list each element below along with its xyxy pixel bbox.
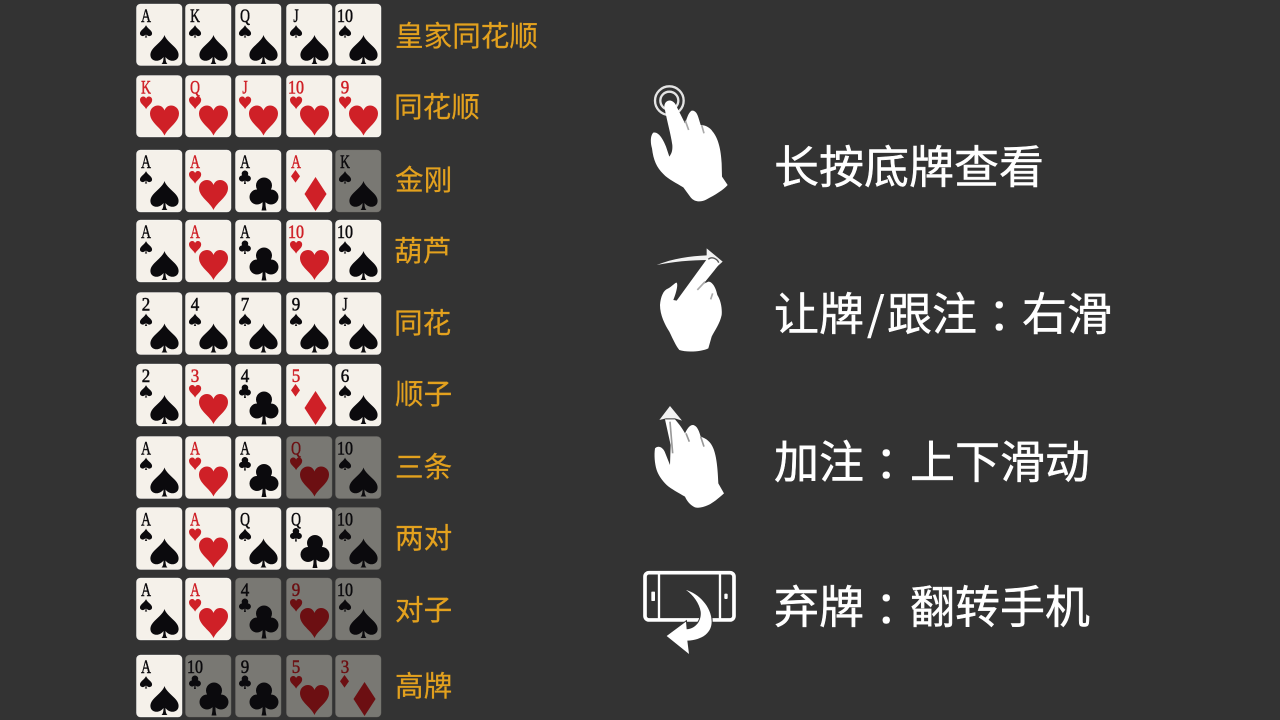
card 10 spade dimmed [336, 508, 381, 570]
icon: long press hand [651, 86, 728, 201]
card A spade: A [141, 221, 151, 243]
card A spade: A [141, 151, 151, 173]
card 10 spade: 10 [337, 221, 353, 242]
card 9 spade [286, 292, 332, 354]
card row: straight flush [136, 76, 381, 137]
card Q spade: Q [240, 508, 250, 530]
card 4 club dimmed [236, 578, 281, 640]
card 9 spade: 9 [292, 294, 300, 315]
card K heart [136, 76, 182, 137]
card row: three of a kind [136, 436, 381, 498]
text: check or call swipe right: 跟注 [887, 289, 977, 340]
icon: swipe right hand [657, 248, 723, 352]
card 9 heart dimmed: 9 [292, 579, 300, 600]
card A spade [136, 655, 182, 717]
card J spade [286, 4, 332, 66]
card A spade [136, 578, 182, 640]
card A heart [186, 508, 231, 570]
label: high card: 高牌 [395, 671, 452, 703]
card Q club: Q [291, 508, 301, 530]
card A club [236, 220, 281, 282]
card 5 heart dimmed [286, 655, 332, 717]
card 10 spade dimmed: 10 [337, 508, 353, 530]
card A club [236, 436, 281, 498]
card Q spade [236, 508, 281, 570]
text: check or call swipe right: 右滑 [1022, 289, 1112, 340]
card A heart [186, 578, 231, 640]
card 10 spade [336, 4, 381, 66]
card 5 heart dimmed: 5 [292, 656, 300, 677]
card row: straight [136, 364, 381, 426]
card Q heart: Q [190, 76, 200, 98]
label: two pair: 两对 [395, 523, 452, 555]
label: straight: 顺子 [395, 379, 452, 411]
card K spade [186, 4, 231, 66]
card 10 club dimmed [186, 655, 231, 717]
card A diamond [286, 150, 332, 212]
card A spade [136, 508, 182, 570]
card A heart: A [190, 221, 200, 243]
card row: one pair [136, 578, 381, 640]
label: royal flush: 皇家同花顺 [395, 21, 538, 53]
card 4 club [236, 364, 281, 426]
card A heart [186, 436, 231, 498]
card K spade: K [190, 5, 200, 27]
text: fold flip the phone: 翻转手机 [910, 582, 1090, 633]
card 10 heart: 10 [288, 221, 304, 242]
card 7 spade [236, 292, 281, 354]
card 4 spade [186, 292, 231, 354]
label: one pair: 对子 [395, 595, 452, 627]
card Q club [286, 508, 332, 570]
card A heart [186, 220, 231, 282]
card row: flush [136, 292, 381, 354]
text: check or call swipe right: 让牌 [774, 289, 864, 340]
card A club: A [240, 151, 250, 173]
card row: full house [136, 220, 381, 282]
card J spade [336, 292, 381, 354]
card A heart: A [190, 508, 200, 530]
card A heart: A [190, 151, 200, 173]
card A spade [136, 436, 182, 498]
card 4 spade: 4 [191, 294, 199, 315]
card A spade: A [141, 579, 151, 601]
card 10 heart: 10 [288, 76, 304, 98]
card A club: A [240, 221, 250, 243]
card 4 club dimmed: 4 [241, 579, 249, 600]
card Q spade: Q [240, 5, 250, 27]
card 5 diamond [286, 364, 332, 426]
card row: high card [136, 655, 381, 717]
card 10 spade dimmed: 10 [337, 437, 353, 459]
card 10 heart [286, 76, 332, 137]
text: fold flip the phone: 弃牌 [774, 582, 864, 633]
card row: two pair [136, 508, 381, 570]
card Q heart dimmed [286, 436, 332, 498]
card A spade: A [141, 656, 151, 678]
card 9 heart: 9 [341, 77, 349, 98]
card 9 club dimmed: 9 [241, 656, 249, 677]
card 9 heart [336, 76, 381, 137]
text: check or call swipe right: ： [988, 289, 1033, 340]
card 3 heart [186, 364, 231, 426]
card 4 club: 4 [241, 365, 249, 386]
card A diamond: A [291, 151, 301, 173]
card 7 spade: 7 [241, 294, 249, 315]
card 2 spade: 2 [142, 294, 150, 315]
label: four of a kind: 金刚 [395, 165, 452, 197]
card A heart: A [190, 437, 200, 459]
card A spade [136, 150, 182, 212]
card 9 heart dimmed [286, 578, 332, 640]
card 2 spade [136, 292, 182, 354]
card K spade dimmed: K [340, 151, 350, 173]
card 10 spade [336, 220, 381, 282]
card J spade: J [293, 5, 299, 27]
card 10 spade dimmed [336, 436, 381, 498]
text: raise swipe up and down: 上下滑动 [910, 437, 1090, 488]
card 10 spade dimmed: 10 [337, 579, 353, 600]
label: straight flush: 同花顺 [394, 92, 480, 124]
card A heart: A [190, 579, 200, 601]
card 3 diamond dimmed [336, 655, 381, 717]
card A spade: A [141, 508, 151, 530]
icon: swipe up hand [655, 406, 724, 508]
card 10 spade dimmed [336, 578, 381, 640]
card 2 spade: 2 [142, 365, 150, 386]
card Q heart [186, 76, 231, 137]
label: three of a kind: 三条 [395, 452, 452, 484]
text: fold flip the phone: ： [875, 582, 920, 633]
text: raise swipe up and down: ： [875, 437, 920, 488]
card 2 spade [136, 364, 182, 426]
card 3 diamond dimmed: 3 [341, 656, 349, 677]
card K spade dimmed [336, 150, 381, 212]
card K heart: K [141, 76, 151, 98]
card J heart: J [242, 76, 248, 98]
card A heart [186, 150, 231, 212]
text: raise swipe up and down: 加注 [774, 437, 864, 488]
card A club: A [240, 437, 250, 459]
icon: flip phone [645, 573, 734, 654]
card 6 spade [336, 364, 381, 426]
card 5 diamond: 5 [292, 365, 300, 386]
label: full house: 葫芦 [394, 236, 451, 268]
card A spade [136, 220, 182, 282]
card 6 spade: 6 [341, 365, 349, 386]
card 9 club dimmed [236, 655, 281, 717]
label: flush: 同花 [394, 308, 451, 340]
card A spade: A [141, 5, 151, 27]
card row: royal flush [136, 4, 381, 66]
text: long press to view hole cards: 长按底牌查看 [774, 142, 1044, 193]
card 10 heart [286, 220, 332, 282]
card A spade [136, 4, 182, 66]
card J heart [236, 76, 281, 137]
card 10 spade: 10 [337, 5, 353, 26]
card A club [236, 150, 281, 212]
card Q heart dimmed: Q [291, 437, 301, 459]
card A spade: A [141, 437, 151, 459]
card Q spade [236, 4, 281, 66]
card row: four of a kind [136, 150, 381, 212]
text: check or call swipe right: / [867, 278, 885, 343]
card J spade: J [342, 293, 348, 315]
card 10 club dimmed: 10 [187, 656, 203, 677]
card 3 heart: 3 [191, 365, 199, 386]
